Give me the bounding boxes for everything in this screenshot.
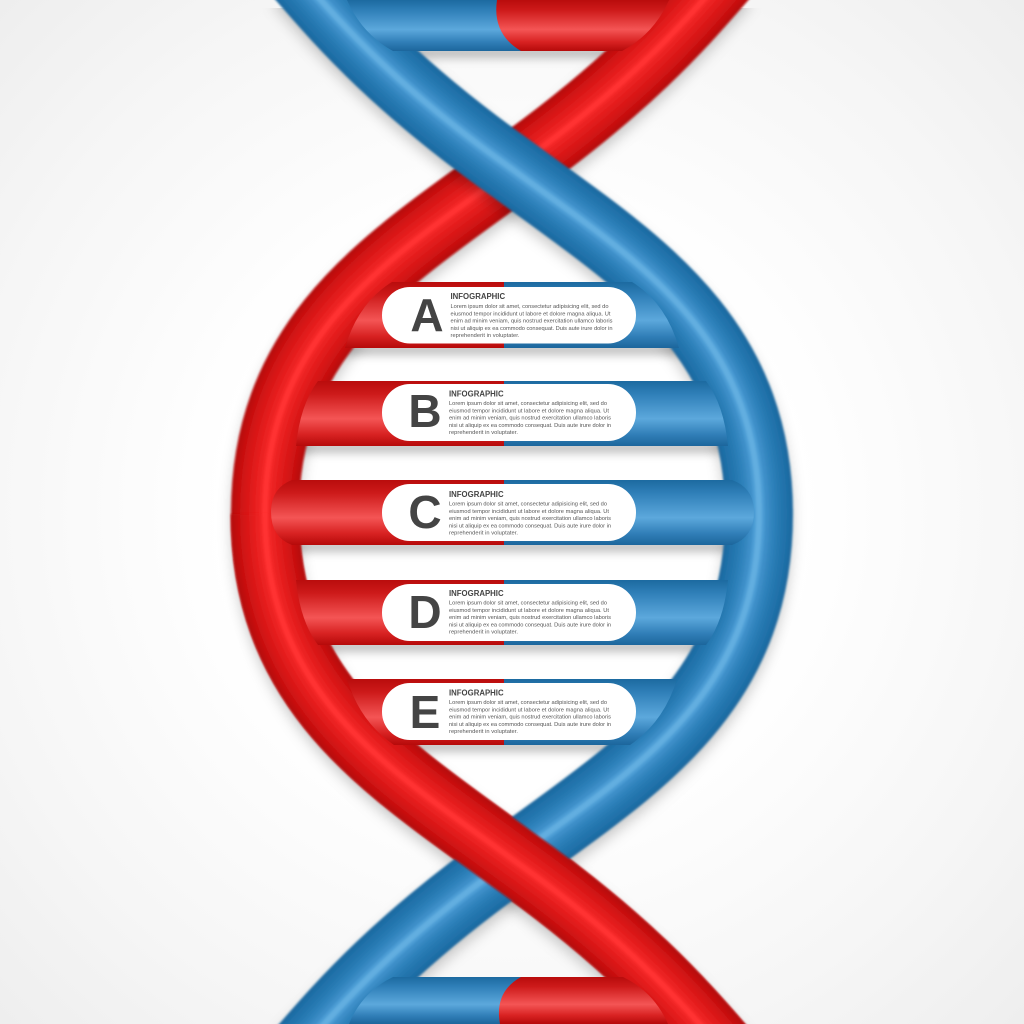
panel E: INFOGRAPHIC — [449, 688, 504, 698]
red strand lower section, in front of blue — [265, 514, 726, 1024]
panel C: reprehenderit in voluptater. — [449, 530, 518, 536]
panel B — [382, 384, 636, 441]
rung E — [347, 679, 677, 745]
panel D: Lorem ipsum dolor sit amet, consectetur adipisicing elit, sed do — [449, 600, 607, 606]
red strand shadow — [265, 0, 726, 1024]
panel E: eiusmod tempor incididunt ut labore et dolore magna aliqua. Ut — [449, 707, 609, 713]
blue strand shadow — [298, 0, 759, 1024]
panel A: eiusmod tempor incididunt ut labore et dolore magna aliqua. Ut — [450, 311, 611, 317]
panel D: nisi ut aliquip ex ea commodo consequat. Duis aute irure dolor in — [449, 622, 611, 628]
panel E: enim ad minim veniam, quis nostrud exercitation ullamco laboris — [449, 714, 611, 720]
rung A — [345, 282, 679, 348]
panel C: INFOGRAPHIC — [449, 490, 504, 499]
panel E — [382, 683, 636, 740]
panel B: enim ad minim veniam, quis nostrud exercitation ullamco laboris — [449, 416, 611, 422]
panel E: reprehenderit in voluptater. — [449, 729, 518, 735]
panel C: eiusmod tempor incididunt ut labore et dolore magna aliqua. Ut — [449, 509, 609, 515]
panel D: eiusmod tempor incididunt ut labore et dolore magna aliqua. Ut — [449, 608, 609, 614]
rung B — [296, 381, 728, 446]
panel B: INFOGRAPHIC — [449, 390, 504, 398]
rung shadows — [280, 48, 744, 751]
top rung — [347, 0, 669, 51]
panel C: nisi ut aliquip ex ea commodo consequat. Duis aute irure dolor in — [449, 523, 611, 529]
panel C: Lorem ipsum dolor sit amet, consectetur adipisicing elit, sed do — [449, 502, 607, 508]
panel A: Lorem ipsum dolor sit amet, consectetur adipisicing elit, sed do — [450, 304, 608, 310]
panel E: nisi ut aliquip ex ea commodo consequat. Duis aute irure dolor in — [449, 722, 611, 728]
panel D — [382, 584, 636, 641]
panel A: nisi ut aliquip ex ea commodo consequat. Duis aute irure dolor in — [450, 326, 612, 332]
panel B: Lorem ipsum dolor sit amet, consectetur adipisicing elit, sed do — [449, 401, 607, 407]
red strand — [265, 0, 726, 1024]
panel A — [382, 287, 636, 344]
panel C — [382, 484, 636, 541]
rung D — [296, 580, 728, 645]
panel A: INFOGRAPHIC — [450, 292, 505, 301]
panel B: nisi ut aliquip ex ea commodo consequat. Duis aute irure dolor in — [449, 423, 611, 429]
panel D: enim ad minim veniam, quis nostrud exercitation ullamco laboris — [449, 615, 611, 621]
panel E: Lorem ipsum dolor sit amet, consectetur adipisicing elit, sed do — [449, 700, 607, 706]
panel D: D — [408, 586, 442, 638]
panel D: reprehenderit in voluptater. — [449, 630, 518, 636]
panel D: INFOGRAPHIC — [449, 589, 504, 598]
panel B: B — [408, 385, 442, 437]
panel C: enim ad minim veniam, quis nostrud exercitation ullamco laboris — [449, 516, 611, 522]
panel B: eiusmod tempor incididunt ut labore et dolore magna aliqua. Ut — [449, 408, 609, 414]
panel A: A — [410, 289, 444, 341]
bottom rung — [349, 977, 668, 1024]
blue strand — [298, 0, 759, 1024]
panel C: C — [408, 486, 442, 538]
panel A: enim ad minim veniam, quis nostrud exercitation ullamco laboris — [450, 318, 613, 324]
panel E: E — [410, 686, 440, 738]
rung C — [271, 480, 754, 545]
panel B: reprehenderit in voluptater. — [449, 430, 518, 436]
panel A: reprehenderit in voluptater. — [450, 333, 520, 339]
